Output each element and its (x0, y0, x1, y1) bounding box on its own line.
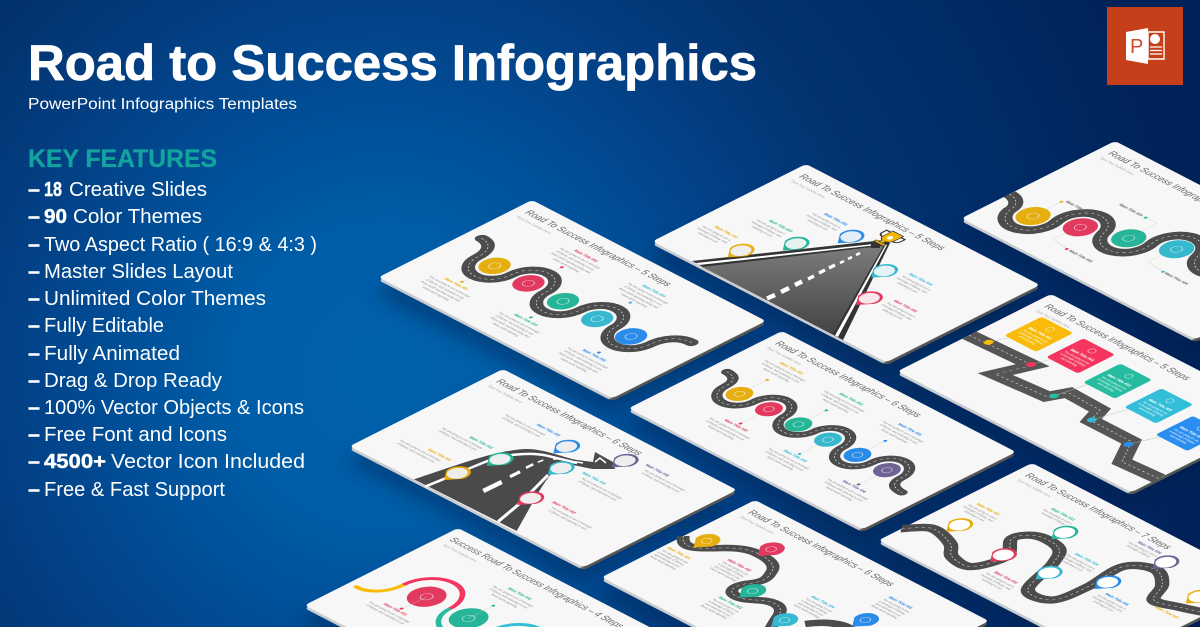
panel: slide left, winding road 5 steps: Main Title #04 (641, 284, 668, 298)
panel: slide bottom centre, winding road 6 steps: You are going to use (720, 561, 750, 576)
panel: slide bottom centre, winding road 6 steps: You are going to use (711, 598, 741, 613)
panel: slide left, winding road 5 steps: Main Title #02 (573, 249, 600, 263)
panel: slide lower left, highway 6 steps: You are going to use a message (398, 439, 442, 462)
panel: slide lower left, highway 6 steps: You are going to use a message (550, 506, 594, 529)
feature list: Unlimited Color Themes (44, 288, 266, 310)
panel: slide centre, winding road 6 steps: these work reporting (880, 429, 909, 444)
panel: slide lower left, highway 6 steps: of Ebony, and selecting to use (437, 430, 478, 451)
panel: slide top centre, straight road to trophy: message of Ebony, and (750, 221, 783, 238)
panel: slide top centre, straight road to trophy: Main Title #03 (767, 219, 795, 233)
panel: slide top right, 5 steps: Main Title #02 (1067, 249, 1095, 263)
panel: slide centre, winding road 6 steps: of Ebony, and selecting to use (819, 393, 860, 414)
panel: slide lower left, highway 6 steps: Main Title #05 (535, 423, 563, 437)
panel: slide right middle, zigzag road with colour boxes: You are going to use (1021, 329, 1049, 343)
panel: slide left, winding road 5 steps: You are going to use a message (566, 347, 610, 369)
feature list: Drag & Drop Ready (44, 370, 222, 392)
panel: slide lower right, winding road 7 steps: selecting to use (980, 578, 1004, 590)
panel: slide centre, winding road 6 steps: Main Title #02 (723, 418, 750, 433)
panel: slide left, winding road 5 steps: these work reporting today and (557, 352, 600, 374)
panel: slide left, winding road 5 steps: of Ebony, and selecting to use (562, 350, 604, 371)
panel: slide left, winding road 5 steps: You are going to use a message (428, 275, 472, 298)
panel: slide left, winding road 5 steps: Main Title #03 (512, 313, 540, 327)
panel: slide centre, winding road 6 steps: these work reporting (706, 425, 736, 440)
panel: slide centre, winding road 6 steps: Main Title #06 (841, 479, 869, 494)
panel: slide lower right, winding road 7 steps: You are going to use a (984, 572, 1016, 588)
panel: slide lower right, winding road 7 steps: Main Title #07 (1154, 606, 1181, 620)
panel: slide bottom centre, winding road 6 steps: these work reporting (648, 555, 678, 570)
panel: slide right middle, zigzag road with colour boxes: Main Title #01 (1027, 326, 1055, 341)
panel: slide right middle, zigzag road with colour boxes: a message of Ebony (1137, 402, 1165, 417)
panel: slide bottom centre, winding road 6 steps: these work reporting (709, 567, 738, 582)
panel: slide right middle, zigzag road with colour boxes: Main Title #04 (1147, 398, 1175, 412)
subtitle: PowerPoint Infographics Templates (28, 96, 297, 113)
panel: slide lower right, winding road 7 steps: You are going to use a (1065, 554, 1097, 570)
panel: slide right middle, zigzag road with colour boxes: and selecting (1096, 382, 1116, 392)
panel: slide bottom left, coloured ribbon road 4 steps: Main Title #01 (382, 602, 410, 617)
panel: slide left, winding road 5 steps: these work reporting today and (419, 280, 462, 302)
panel: slide top centre, straight road to trophy: Main Title #05 (822, 212, 850, 227)
panel: slide right middle, zigzag road with colour boxes: and selecting (1168, 434, 1188, 444)
panel: slide lower right, winding road 7 steps: Main Title #01 (975, 502, 1003, 517)
panel: slide top centre, straight road to trophy: You are going to use a (885, 302, 917, 318)
panel: slide left, winding road 5 steps: these work reporting today and (550, 252, 592, 274)
panel: slide lower right, winding road 7 steps: You are going to use a (1041, 509, 1073, 525)
panel: slide bottom centre, winding road 6 steps: Type Your Subtitle Here (738, 515, 776, 535)
panel: slide bottom left, coloured ribbon road 4 steps: You are going to use a message (368, 601, 411, 624)
panel: slide lower right, winding road 7 steps: selecting to use (1092, 600, 1115, 612)
panel: slide centre, winding road 6 steps: You are going to use a message (826, 478, 870, 501)
panel: slide bottom centre, winding road 6 steps: these work reporting (792, 604, 821, 619)
panel: slide bottom centre, winding road 6 steps: and selecting to use (874, 602, 903, 617)
panel: slide left, winding road 5 steps: Type Your Subtitle Here (515, 215, 553, 235)
feature list: 90 (44, 206, 67, 228)
panel: slide lower right, winding road 7 steps: message of Ebony (1040, 512, 1067, 526)
panel: slide bottom left, coloured ribbon road 4 steps: of Ebony, and selecting to use (488, 588, 529, 609)
panel: slide right middle, zigzag road with colour boxes: a message of Ebony (1168, 430, 1197, 445)
panel: slide top centre, straight road to trophy: message of Ebony, and (895, 277, 928, 294)
feature list: – (28, 206, 40, 228)
panel: slide left, winding road 5 steps: share work reporting (559, 357, 589, 373)
panel: slide top centre, straight road to trophy: selecting to use (696, 232, 719, 244)
panel: slide centre, winding road 6 steps: Main Title #05 (897, 422, 924, 437)
panel: slide right middle, zigzag road with colour boxes: a message of Ebony (1017, 331, 1045, 345)
panel: slide top centre, straight road to trophy: selecting to use (750, 225, 774, 237)
panel: slide left, winding road 5 steps: share work reporting (551, 258, 581, 273)
panel: slide lower left, highway 6 steps: Road To Success Infographics – 6 Steps (492, 378, 646, 457)
panel: slide left, winding road 5 steps: You are going to use a message (497, 311, 541, 334)
feature list: – (28, 288, 40, 310)
panel: slide lower right, winding road 7 steps: message of Ebony (1125, 544, 1152, 558)
panel: slide top centre, straight road to trophy: You are going to use a (701, 225, 732, 241)
feature list: – (28, 370, 40, 392)
panel: slide lower right, winding road 7 steps: Road To Success Infographics – 7 Steps (1021, 472, 1175, 551)
panel: slide centre, winding road 6 steps (622, 331, 1016, 545)
panel: slide left, winding road 5 steps: share work reporting (619, 293, 649, 308)
panel: slide lower right, winding road 7 steps: message of Ebony, and (962, 505, 995, 522)
panel: slide top centre, straight road to trophy: You are going to use a (810, 212, 842, 229)
panel: slide lower right, winding road 7 steps: Main Title #03 (1050, 507, 1077, 521)
panel: slide bottom centre, winding road 6 steps: a message of Ebony, (877, 600, 907, 615)
feature list: – (28, 424, 40, 446)
panel: slide right middle, zigzag road with colour boxes: You are going to use (1063, 350, 1091, 365)
panel: slide bottom left, coloured ribbon road 4 steps: Main Title #02 (506, 587, 534, 601)
panel: slide centre, winding road 6 steps: Type Your Subtitle Here (765, 346, 803, 366)
panel: slide right middle, zigzag road with colour boxes: Main Title #03 (1106, 373, 1133, 387)
panel: slide left, winding road 5 steps: of Ebony, and selecting to use (555, 250, 596, 271)
panel: slide bottom centre, winding road 6 steps: a message of Ebony, (656, 551, 686, 566)
panel: slide bottom centre, winding road 6 steps: and selecting to use (713, 565, 742, 580)
feature list: – (28, 261, 40, 283)
panel: slide bottom centre, winding road 6 steps: and selecting to use (653, 553, 681, 568)
panel: slide right middle, zigzag road with colour boxes: and selecting (1137, 407, 1157, 417)
panel: slide lower right, winding road 7 steps: message of Ebony, and (1060, 555, 1093, 572)
panel: slide lower left, highway 6 steps: Main Title #03 (468, 436, 496, 450)
panel: slide bottom left, coloured ribbon road 4 steps (298, 528, 692, 627)
panel: slide bottom centre, winding road 6 steps: Main Title #03 (717, 596, 744, 610)
feature list: 100% Vector Objects & Icons (44, 397, 304, 419)
panel: slide centre, winding road 6 steps: of Ebony, and selecting to use (705, 420, 746, 441)
feature list: – (28, 397, 40, 419)
panel: slide left, winding road 5 steps: Main Title #05 (581, 348, 609, 363)
panel: slide bottom centre, winding road 6 steps: You are going to use (804, 598, 834, 613)
panel: slide bottom left, coloured ribbon road 4 steps: Type Your Subtitle Here (441, 543, 479, 563)
feature list: Creative Slides (69, 179, 207, 201)
panel: slide bottom centre, winding road 6 steps (595, 500, 989, 627)
feature list: Vector Icon Included (111, 451, 305, 473)
panel: slide lower right, winding road 7 steps: You are going to use a (1095, 594, 1127, 610)
panel: slide left, winding road 5 steps: You are going to use a message (626, 282, 670, 305)
panel: slide top right, 5 steps: Main Title #04 (1163, 271, 1190, 286)
feature list: – (28, 315, 40, 337)
feature list (28, 179, 317, 501)
feature list: Fully Editable (44, 315, 164, 337)
panel: slide top centre, straight road to trophy: message of Ebony, and (805, 214, 838, 231)
feature list: – (28, 179, 40, 201)
panel: slide top centre, straight road to trophy (646, 164, 1040, 378)
panel: slide top centre, straight road to trophy: message of Ebony, and (880, 304, 913, 321)
panel: slide lower right, winding road 7 steps: Main Title #05 (1104, 592, 1131, 607)
panel: slide lower left, highway 6 steps: You are going to use a message (440, 427, 484, 449)
panel: slide right middle, zigzag road with colour boxes: and selecting (1059, 357, 1079, 367)
panel: slide lower right, winding road 7 steps: You are going to use a (1126, 541, 1158, 557)
panel: slide top centre, straight road to trophy: You are going to use a (900, 275, 932, 291)
panel: slide lower left, highway 6 steps: of Ebony, and selecting to use (640, 472, 681, 493)
panel: slide lower left, highway 6 steps (343, 369, 737, 583)
panel: slide bottom left, coloured ribbon road 4 steps: of Ebony, and selecting to use (365, 604, 406, 625)
panel: slide lower left, highway 6 steps: You are going to use a message (503, 414, 547, 436)
panel: slide left, winding road 5 steps: of Ebony, and selecting to use (494, 314, 535, 336)
panel: slide lower right, winding road 7 steps: selecting to use (963, 510, 986, 522)
panel: slide lower left, highway 6 steps: of Ebony, and selecting to use (500, 417, 542, 438)
panel: slide lower right, winding road 7 steps (872, 463, 1200, 627)
panel: slide centre, winding road 6 steps: You are going to use a message (881, 420, 925, 443)
panel: slide bottom centre, winding road 6 steps: Main Title #01 (666, 546, 693, 560)
panel: slide left, winding road 5 steps: of Ebony, and selecting to use (623, 285, 664, 306)
panel: slide centre, winding road 6 steps: You are going to use a message (822, 390, 866, 413)
panel: slide left, winding road 5 steps: share work reporting (421, 286, 451, 301)
panel: slide lower right, winding road 7 steps: selecting to use (1061, 560, 1084, 572)
panel: slide centre, winding road 6 steps: these work reporting (766, 456, 795, 471)
panel: slide centre, winding road 6 steps: Main Title #01 (778, 361, 806, 376)
panel: slide lower right, winding road 7 steps: Type Your Subtitle Here (1015, 478, 1053, 498)
panel: slide bottom centre, winding road 6 steps: Road To Success Infographics – 6 Steps (744, 509, 898, 588)
panel: slide bottom centre, winding road 6 steps: a message of Ebony, (707, 600, 737, 615)
panel: slide lower left, highway 6 steps: of Ebony, and selecting to use (395, 442, 436, 463)
panel: slide bottom centre, winding road 6 steps: and selecting to use (703, 602, 732, 617)
panel: slide lower left, highway 6 steps: Type Your Subtitle Here (486, 384, 524, 404)
panel: slide centre, winding road 6 steps: of Ebony, and selecting to use (760, 362, 801, 383)
panel: slide lower left, highway 6 steps: You are going to use a message (643, 469, 687, 492)
panel: slide bottom centre, winding road 6 steps: You are going to use (660, 549, 690, 564)
panel: slide left, winding road 5 steps: these work reporting today and (618, 287, 660, 309)
feature list: – (28, 479, 40, 501)
panel: slide centre, winding road 6 steps: You are going to use a message (767, 448, 811, 470)
panel: slide right middle, zigzag road with colour boxes: Type Your Subtitle Here (1034, 309, 1072, 329)
panel: slide lower left, highway 6 steps: of Ebony, and selecting to use (577, 480, 618, 501)
panel: slide lower right, winding road 7 steps: Main Title #04 (1073, 552, 1101, 566)
icon: PowerPoint logo: P (1130, 36, 1143, 58)
panel: slide lower left, highway 6 steps: Main Title #01 (426, 448, 454, 462)
panel: slide lower right, winding road 7 steps: message of Ebony, and (979, 574, 1012, 591)
panel: slide bottom centre, winding road 6 steps: these work reporting (699, 604, 728, 619)
panel: slide bottom centre, winding road 6 steps: these work reporting (870, 604, 899, 619)
panel: slide top right, 5 steps (955, 141, 1200, 355)
panel: slide top right, 5 steps: Type Your Subtitle Here (1098, 156, 1136, 176)
panel: slide left, winding road 5 steps: Main Title #01 (443, 277, 471, 291)
panel: slide lower right, winding road 7 steps: Main Title #02 (992, 571, 1020, 585)
panel: slide top centre, straight road to trophy: Main Title #02 (892, 299, 920, 313)
feature list: Master Slides Layout (44, 261, 233, 283)
panel: slide top right, 5 steps: Main Title #01 (1064, 200, 1092, 214)
panel: slide bottom centre, winding road 6 steps: You are going to use (882, 598, 911, 613)
panel: slide centre, winding road 6 steps: Main Title #03 (838, 392, 865, 406)
panel: slide top centre, straight road to trophy: message of Ebony, and (696, 227, 729, 244)
panel: slide left, winding road 5 steps: of Ebony, and selecting to use (424, 278, 466, 300)
panel: slide lower left, highway 6 steps: You are going to use a message (580, 477, 624, 500)
panel: slide lower left, highway 6 steps: Main Title #02 (551, 501, 578, 515)
feature list: Two Aspect Ratio ( 16:9 & 4:3 ) (44, 234, 317, 256)
panel: slide lower right, winding road 7 steps: message of Ebony, and (1091, 595, 1124, 612)
heading: key features: KEY FEATURES (28, 145, 217, 173)
panel: slide left, winding road 5 steps: share work reporting (491, 322, 520, 337)
panel: slide lower left, highway 6 steps: Main Title #04 (581, 471, 608, 485)
panel: slide bottom left, coloured ribbon road 4 steps: these work reporting (490, 593, 519, 608)
panel: slide lower right, winding road 7 steps: Main Title #06 (1136, 541, 1164, 555)
panel: slide bottom centre, winding road 6 steps: Main Title #04 (810, 595, 837, 609)
feature list: 4500+ (44, 451, 106, 473)
panel: slide bottom centre, winding road 6 steps: a message of Ebony, (716, 563, 746, 578)
panel: slide left, winding road 5 steps: these work reporting today and (489, 316, 531, 338)
panel: slide right middle, zigzag road with colour boxes: You are going to use (1100, 376, 1128, 390)
panel: slide bottom left, coloured ribbon road 4 steps: You are going to use a message (491, 585, 535, 608)
panel: slide bottom centre, winding road 6 steps: Main Title #02 (726, 558, 754, 572)
feature list: Free Font and Icons (44, 424, 227, 446)
panel: slide top centre, straight road to trophy: Main Title #01 (713, 225, 741, 239)
panel: slide centre, winding road 6 steps: of Ebony, and selecting to use (878, 423, 919, 445)
panel: slide lower left, highway 6 steps: Main Title #06 (644, 463, 672, 478)
panel: slide right middle, zigzag road with colour boxes: and selecting (1017, 335, 1037, 345)
panel: slide left, winding road 5 steps: Road To Success Infographics – 5 Steps (521, 209, 675, 288)
panel: slide bottom centre, winding road 6 steps: and selecting to use (796, 602, 825, 617)
icon: trophy (870, 229, 907, 248)
panel: slide centre, winding road 6 steps: You are going to use a message (763, 359, 807, 382)
panel: slide centre, winding road 6 steps: these work reporting (821, 398, 850, 413)
panel: slide centre, winding road 6 steps: of Ebony, and selecting to use (764, 450, 805, 472)
panel: slide top centre, straight road to trophy: selecting to use (806, 219, 829, 231)
feature list: – (28, 451, 40, 473)
panel: slide left, winding road 5 steps (372, 200, 766, 415)
main title: Road to Success Infographics (28, 35, 757, 91)
feature list: Free & Fast Support (44, 479, 225, 501)
panel: slide bottom centre, winding road 6 steps: a message of Ebony, (800, 599, 830, 615)
feature list: Fully Animated (44, 343, 180, 365)
panel: slide top centre, straight road to trophy: Road To Success Infographics – 5 Steps (795, 173, 949, 252)
panel: slide top centre, straight road to trophy: selecting to use (881, 308, 904, 320)
feature list: – (28, 343, 40, 365)
panel: slide centre, winding road 6 steps: these work reporting (825, 486, 854, 501)
panel: slide right middle, zigzag road with colour boxes: You are going to use (1141, 400, 1169, 415)
panel: slide top centre, straight road to trophy: Main Title #04 (907, 272, 935, 287)
panel: slide centre, winding road 6 steps: these work reporting (762, 367, 791, 383)
panel: slide right middle, zigzag road with colour boxes: You are going to use (1172, 428, 1200, 443)
panel: slide top centre, straight road to trophy: Type Your Subtitle Here (789, 179, 827, 199)
feature list: – (28, 234, 40, 256)
panel: slide right middle, zigzag road with colour boxes: a message of Ebony (1059, 352, 1087, 367)
panel: slide centre, winding road 6 steps: Main Title #04 (782, 449, 810, 463)
panel: slide bottom centre, winding road 6 steps: Main Title #05 (887, 596, 915, 610)
panel: slide right middle, zigzag road with colour boxes (891, 294, 1200, 508)
feature list: Color Themes (73, 206, 202, 228)
panel: slide right middle, zigzag road with colour boxes: Road To Success Infographics – 5 Steps (1040, 303, 1194, 382)
panel: slide left, winding road 5 steps: You are going to use a message (558, 247, 602, 270)
panel: slide top right, 5 steps: Main Title #03 (1118, 203, 1145, 217)
panel: slide lower right, winding road 7 steps: You are going to use a (966, 504, 998, 520)
panel: slide lower left, highway 6 steps: of Ebony, and selecting to use (547, 509, 588, 530)
icon: PowerPoint logo (1107, 7, 1183, 85)
panel: slide centre, winding road 6 steps: of Ebony, and selecting to use (823, 481, 864, 502)
panel: slide right middle, zigzag road with colour boxes: Main Title #02 (1069, 348, 1096, 362)
panel: slide centre, winding road 6 steps: Road To Success Infographics – 6 Steps (771, 340, 925, 419)
panel: slide top centre, straight road to trophy: selecting to use (896, 282, 919, 294)
panel: slide top centre, straight road to trophy: You are going to use a (755, 219, 787, 235)
panel: slide right middle, zigzag road with colour boxes: a message of Ebony (1096, 378, 1124, 392)
panel: slide centre, winding road 6 steps: You are going to use a message (708, 417, 752, 440)
feature list: 18 (44, 179, 62, 201)
